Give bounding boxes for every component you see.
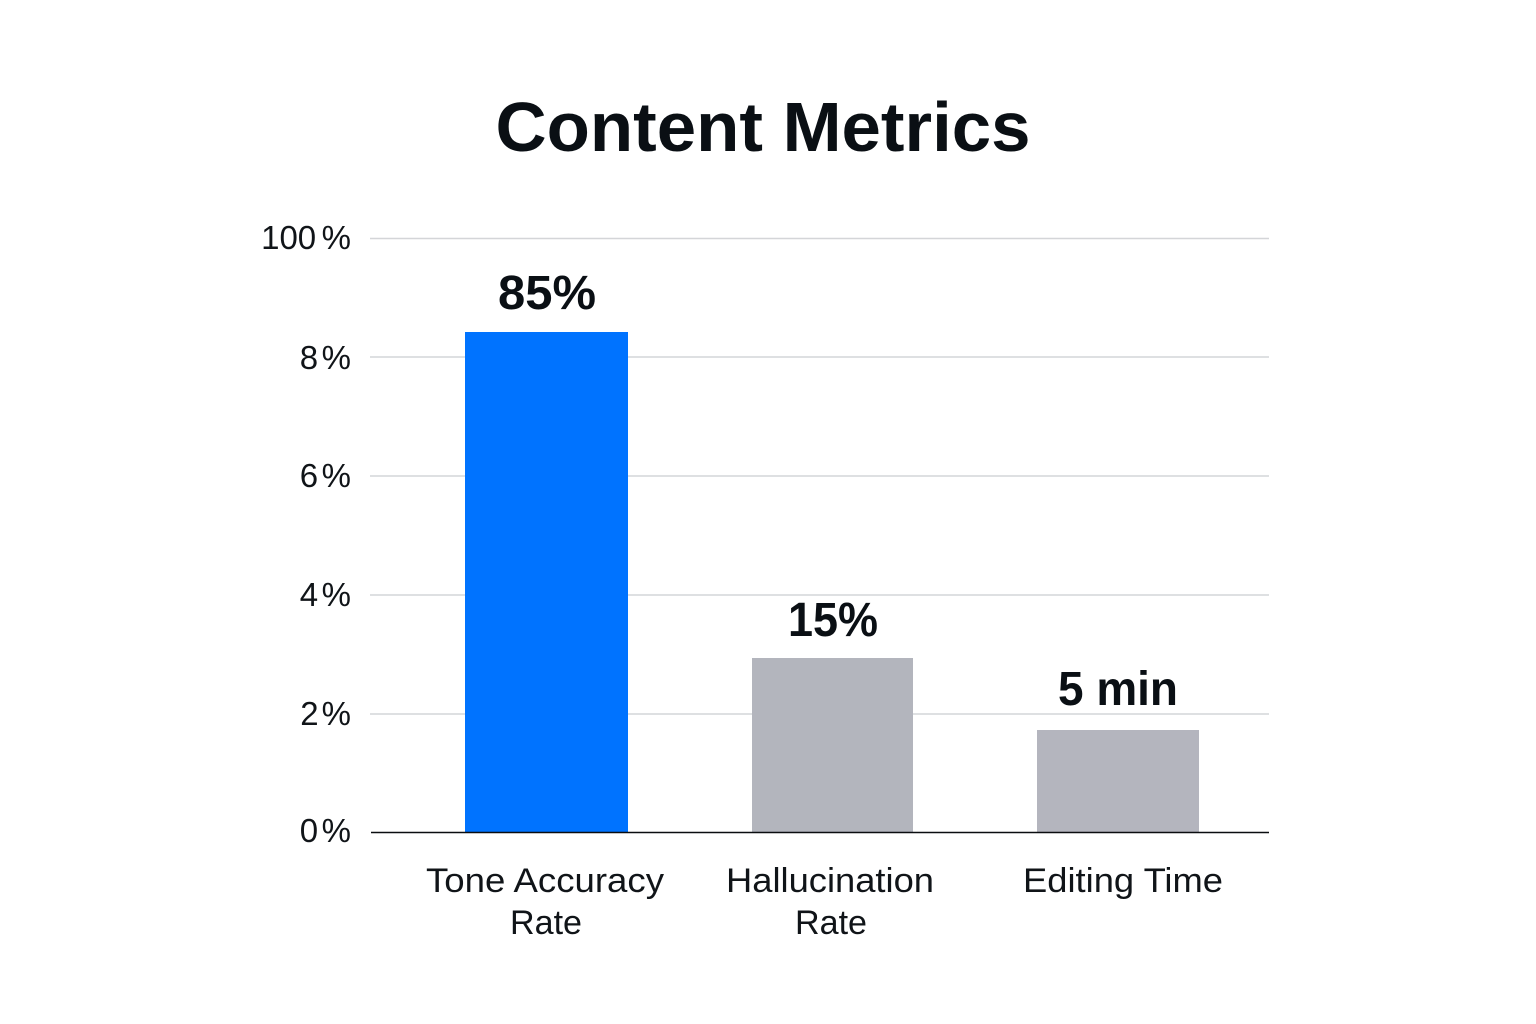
y axis labels — [261, 219, 351, 849]
category labels — [426, 862, 1223, 942]
category labels: Rate — [510, 904, 582, 942]
value labels — [498, 267, 1178, 716]
category labels: Hallucination — [726, 862, 934, 900]
bar: Editing Time — [1037, 730, 1199, 833]
value labels: 5 min — [1058, 663, 1178, 716]
category labels: Rate — [795, 904, 867, 942]
title: Content Metrics — [496, 88, 1030, 166]
value labels: 85% — [498, 267, 596, 320]
category labels: Editing Time — [1023, 862, 1223, 900]
y axis labels: 6% — [300, 457, 351, 494]
category labels: Tone Accuracy — [426, 862, 664, 900]
y axis labels: 8% — [300, 339, 351, 376]
value labels: 15% — [788, 594, 878, 647]
bar: Hallucination Rate — [752, 658, 913, 833]
y axis labels: 100% — [261, 219, 351, 256]
y axis labels: 4% — [300, 576, 351, 613]
y axis labels: 2% — [300, 695, 351, 732]
bar chart — [261, 219, 1269, 942]
bar: Tone Accuracy Rate — [465, 332, 628, 833]
y axis labels: 0% — [300, 812, 351, 849]
